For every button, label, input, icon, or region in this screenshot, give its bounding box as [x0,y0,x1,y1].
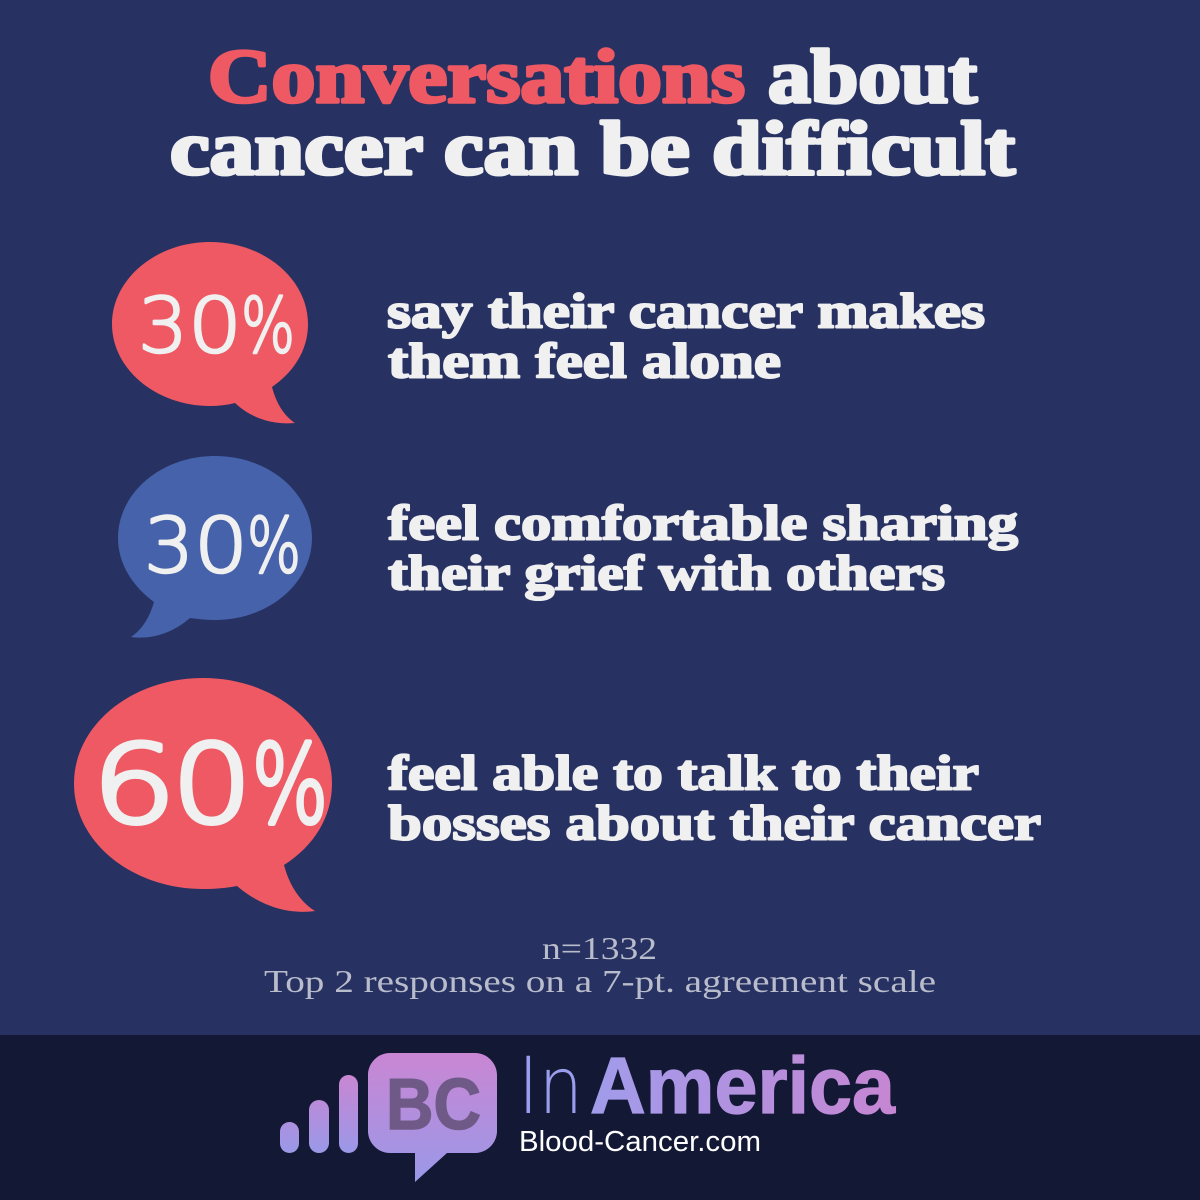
statement text: bosses about their cancer [388,794,1041,850]
wordmark: Blood-Cancer.com: Blood-Cancer.com [519,1126,761,1158]
speech bubble: red 30%: % [241,281,295,370]
statement text [388,494,1018,600]
title [170,35,1015,191]
statement text: feel able to talk to their [388,744,979,800]
statement text: say their cancer makes [387,282,985,338]
icon: signal bars [280,1075,358,1153]
title: about [768,35,977,119]
stat row: 30% feel alone [112,242,985,423]
speech bubble: red 60%: 0 [172,723,252,848]
footer band [0,1035,1200,1200]
statement text [388,744,1041,850]
speech bubble: blue 30% [118,456,312,638]
wordmark: In America: America [590,1041,895,1130]
speech bubble: red 60% [74,678,332,912]
wordmark: In America: In [518,1042,583,1132]
title: cancer can be difficult [170,107,1015,191]
footnote: Top 2 responses on a 7-pt. agreement scale [264,963,936,999]
logo [280,1041,895,1182]
speech bubble: blue 30%: % [247,501,301,590]
speech bubble: red 60%: % [252,723,328,848]
speech bubble: blue 30%: 0 [194,501,248,590]
statement text: feel comfortable sharing [388,494,1018,550]
icon: BC speech bubble [368,1053,497,1182]
statement text: them feel alone [388,332,781,388]
stat row: 60% talk to bosses [74,678,1041,912]
speech bubble: blue 30%: 3 [144,501,194,590]
statement text [387,282,985,388]
speech bubble: red 30%: 0 [188,281,242,370]
speech bubble: red 30% [112,242,308,423]
title: Conversations [208,35,745,119]
statement text: their grief with others [388,544,945,600]
footnote [264,930,936,999]
icon: BC speech bubble: BC [386,1065,481,1145]
footnote: n=1332 [542,930,657,966]
stat row: 30% comfortable sharing grief [118,456,1018,638]
speech bubble: red 60%: 6 [92,723,176,848]
speech bubble: red 30%: 3 [138,281,188,370]
